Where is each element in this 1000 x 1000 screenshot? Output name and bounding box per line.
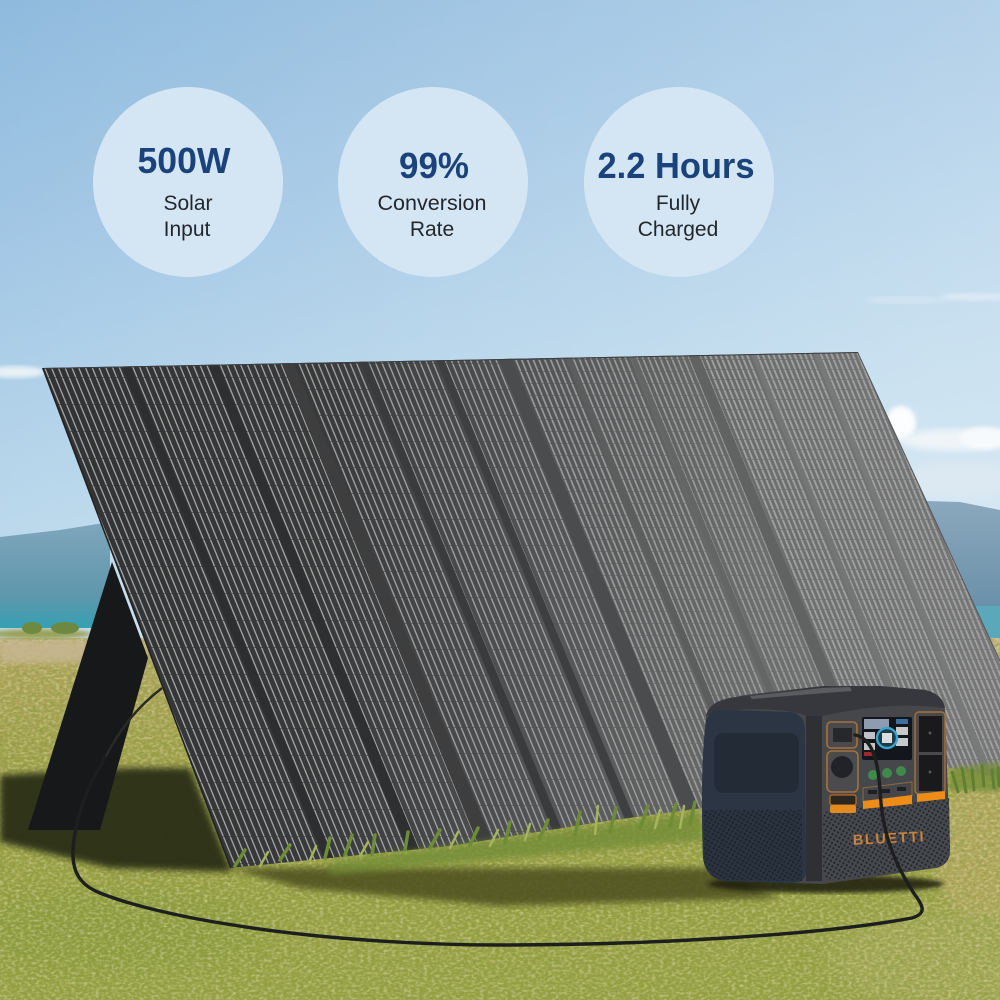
BLUETTI logo: BLUETTI [852, 829, 926, 849]
ground shadows [0, 768, 780, 906]
stat: solar input: Input [164, 218, 211, 241]
DC port box [827, 751, 858, 792]
AC badge [830, 795, 856, 813]
left mesh [704, 810, 802, 881]
left speaker grille [714, 733, 799, 793]
stat: solar input: 500W [138, 140, 231, 181]
grass tufts along panel base [235, 762, 1000, 875]
display screen [862, 717, 912, 760]
stat: conversion rate: 99% [399, 145, 469, 186]
USB row [863, 782, 912, 809]
stat: solar input [93, 87, 283, 277]
stat: fully charged: Fully [656, 192, 701, 215]
station body [702, 686, 950, 884]
background: sky [0, 0, 1000, 660]
stat: fully charged [584, 87, 774, 277]
power station [702, 686, 950, 893]
solar panel [42, 352, 1000, 868]
left side panel [702, 710, 806, 883]
USB-C port box [827, 722, 857, 748]
shrubs on far edge [0, 622, 92, 639]
stat: conversion rate: Conversion [378, 192, 486, 215]
handle on top [750, 687, 852, 699]
stat: fully charged: 2.2 Hours [598, 145, 754, 186]
kickstand [28, 562, 148, 830]
stat: solar input: Solar [163, 192, 213, 215]
distant hills and sea [0, 501, 1000, 666]
top surface [706, 686, 945, 716]
indicator buttons [868, 766, 906, 780]
clouds [0, 293, 1000, 498]
AC outlets [915, 712, 945, 802]
station contact shadow [708, 875, 944, 893]
corner post [806, 716, 822, 881]
stat: conversion rate: Rate [410, 218, 454, 241]
cable: rear section [105, 688, 162, 758]
stat: conversion rate [338, 87, 528, 277]
front mesh [823, 798, 950, 880]
cable [73, 735, 922, 945]
stat: fully charged: Charged [638, 218, 718, 241]
ground: grass field [0, 638, 1000, 1000]
